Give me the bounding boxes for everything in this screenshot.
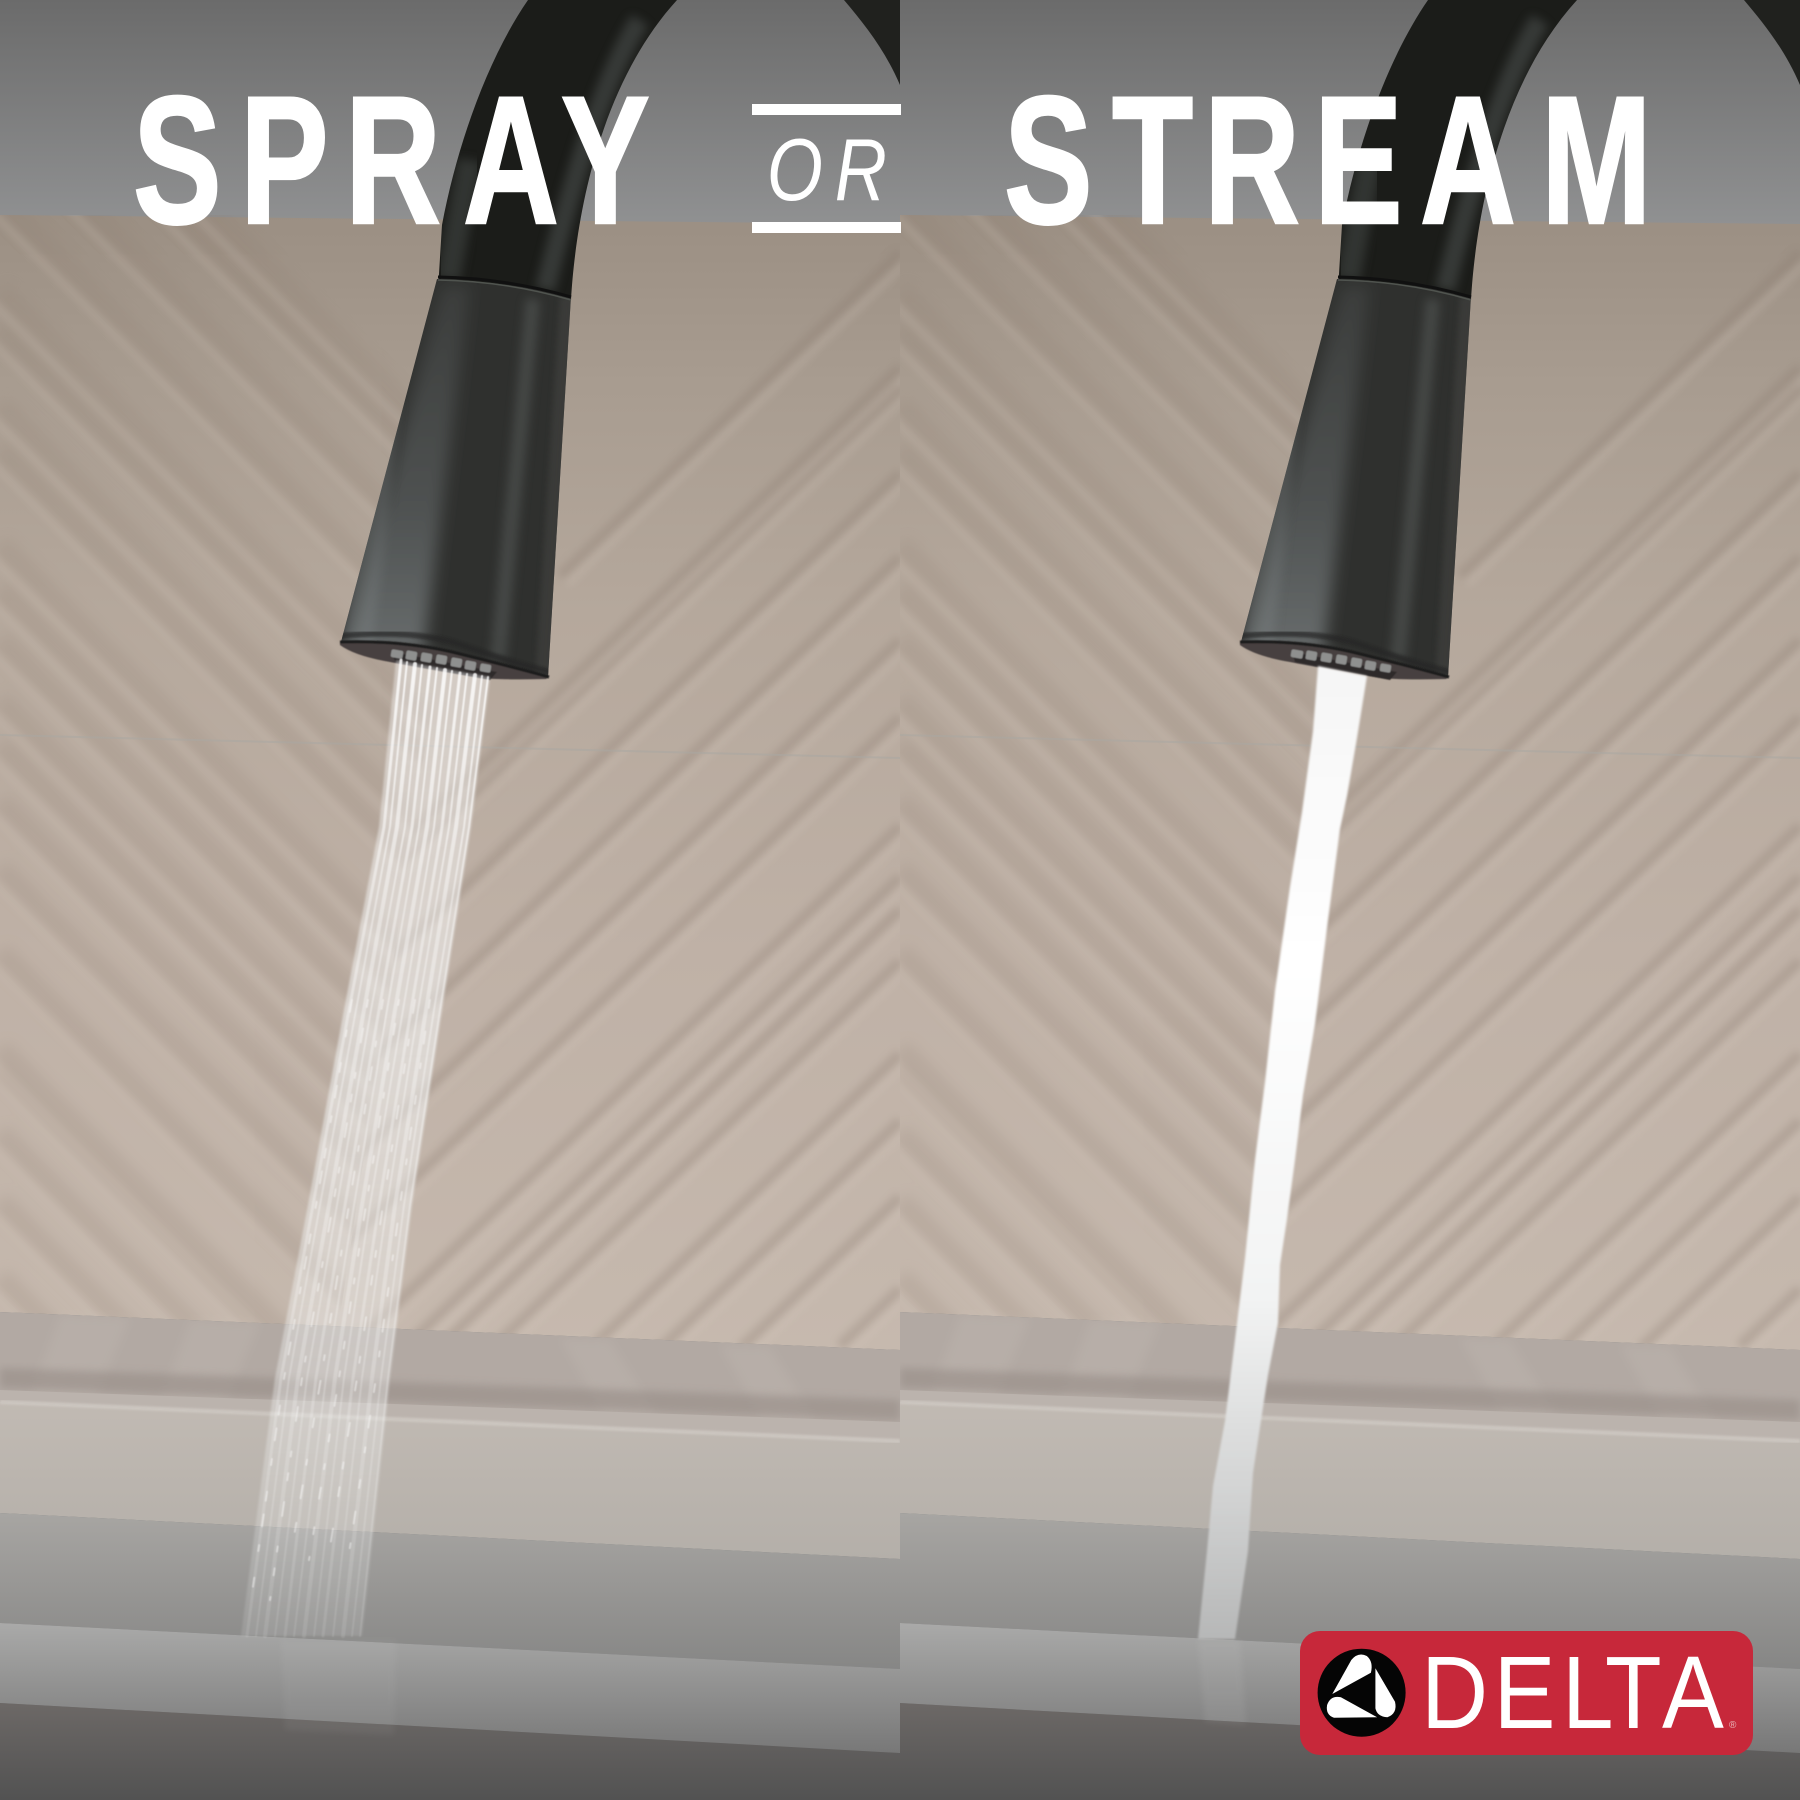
faucet: underside and aerator: [340, 642, 549, 680]
title: SPRAY: SPRAY: [133, 59, 650, 262]
wordmark: DELTA: [1421, 1634, 1724, 1750]
logo: Delta badge: [1300, 1631, 1753, 1755]
counter: sink top reflection stripes: [30, 1315, 820, 1428]
faucet: spout neck: [438, 0, 677, 300]
tile chevron ridges: left half: [0, 0, 600, 1396]
spray body: [241, 660, 490, 1636]
counter: front face: [0, 1402, 900, 1559]
spray reflection on lip: [281, 1640, 396, 1735]
counter: lower sink top: [0, 1390, 900, 1441]
badge background: [1300, 1631, 1753, 1755]
counter: dark floor: [0, 1703, 900, 1800]
faucet: far side of arch: [844, 0, 900, 85]
counter: polished sink top: [0, 1312, 900, 1441]
stream body: [1198, 666, 1367, 1639]
rule top: [752, 104, 901, 115]
counter: inner face: [0, 1513, 900, 1669]
spray droplets: [251, 1000, 430, 1600]
stream reflection on lip: [1198, 1640, 1246, 1725]
counter: lower lip: [0, 1623, 900, 1753]
icon: Delta mark: [1318, 1649, 1406, 1737]
stream water: [1198, 666, 1367, 1725]
panel: stream photo scene: [800, 0, 1800, 1800]
counter: shadow strip: [0, 1368, 900, 1420]
spray streaks: [247, 660, 488, 1636]
rule bottom: [752, 222, 901, 233]
tile backsplash: [0, 215, 900, 1350]
registered mark: ®: [1729, 1720, 1737, 1731]
spray water: [241, 660, 490, 1735]
counter: rim highlight: [0, 1402, 900, 1441]
title: STREAM: STREAM: [1004, 59, 1652, 262]
OR label: OR: [767, 121, 887, 220]
grey wall band: [0, 0, 900, 226]
divider: OR: [752, 104, 901, 233]
panel: spray photo scene: [0, 0, 907, 1800]
tile joint: [0, 735, 900, 758]
faucet: pull-down head: [339, 277, 575, 680]
tile chevron ridges: right half: [300, 253, 907, 1364]
